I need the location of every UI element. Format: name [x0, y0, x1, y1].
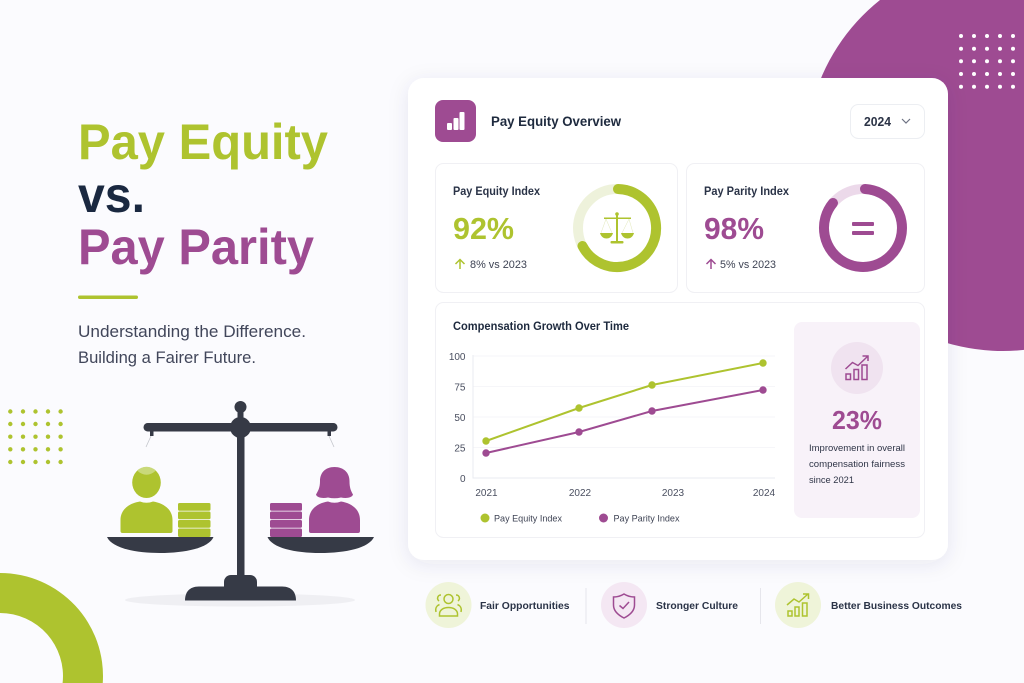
title underline: [78, 296, 138, 299]
year dropdown: 2024: [864, 115, 891, 129]
panel: compensation growth: [436, 302, 924, 538]
callout: 23% improvement: compensation fairness: [809, 459, 905, 470]
line chart: 2021: [475, 488, 498, 499]
line chart: 75: [454, 382, 466, 394]
benefit: better business outcomes: Better Business Outcomes: [831, 600, 962, 612]
callout: 23% improvement: Improvement in overall: [809, 443, 905, 454]
icon: green coin stack: [178, 503, 210, 537]
subtitle: [78, 322, 306, 367]
panel: pay parity index: 98%: [704, 211, 764, 246]
icon: growth chart purple: [846, 356, 868, 380]
illustration: balance scale: [107, 401, 374, 606]
green dot grid: [8, 409, 63, 464]
line chart: 50: [454, 413, 466, 424]
benefit: fair opportunities: Fair Opportunities: [480, 600, 570, 612]
decorative green ring: [0, 573, 103, 683]
arrow up green: [456, 260, 464, 269]
panel: pay equity index: 8% vs 2023: [470, 259, 527, 271]
year dropdown: [850, 104, 924, 138]
panel: pay equity index: [436, 164, 678, 292]
divider: [760, 588, 761, 624]
decorative purple circle: [806, 0, 1024, 351]
panel: pay parity index: Pay Parity Index: [704, 184, 789, 198]
title: [78, 114, 328, 275]
arrow up purple: [706, 260, 716, 269]
line chart: 100: [449, 352, 466, 363]
callout: 23% improvement: [794, 322, 920, 518]
white dot grid: [959, 34, 1015, 89]
callout: 23% improvement: since 2021: [809, 475, 854, 486]
donut chart: 92%: [578, 189, 656, 267]
icon: scales: [600, 212, 634, 244]
icon: man figure: [120, 467, 172, 533]
panel: pay parity index: [686, 164, 924, 292]
dashboard card: [408, 78, 948, 560]
benefit: stronger culture: Stronger Culture: [656, 600, 738, 612]
line chart: 2022: [569, 488, 592, 499]
line chart: 25: [454, 444, 466, 454]
title: vs.: [78, 167, 145, 223]
callout: 23% improvement: 23%: [832, 405, 882, 435]
benefit: fair opportunities: [426, 582, 570, 628]
panel: pay equity index: Pay Equity Index: [453, 184, 540, 198]
header icon: [435, 100, 476, 142]
divider: [586, 588, 587, 624]
chart legend: Pay Parity Index: [614, 514, 680, 524]
chart heading: Compensation Growth Over Time: [453, 321, 629, 333]
subtitle: Building a Fairer Future.: [78, 348, 256, 367]
panel: pay parity index: 5% vs 2023: [720, 259, 776, 271]
line chart: [449, 352, 776, 499]
line chart: 0: [460, 474, 466, 485]
icon: purple coin stack: [270, 503, 302, 537]
chart legend: [480, 514, 680, 524]
chart legend: Pay Equity Index: [494, 514, 562, 524]
icon: woman figure: [309, 467, 360, 533]
benefit: stronger culture: [601, 582, 738, 628]
icon: equals sign: [852, 222, 874, 235]
benefit: better business outcomes: [775, 582, 962, 628]
line chart: 2023: [662, 488, 685, 499]
subtitle: Understanding the Difference.: [78, 322, 306, 341]
title: Pay Equity: [78, 114, 328, 170]
donut chart: 98%: [824, 189, 902, 267]
line chart: 2024: [753, 488, 776, 499]
panel: pay equity index: 92%: [453, 211, 514, 246]
dashboard heading: Pay Equity Overview: [491, 114, 621, 129]
title: Pay Parity: [78, 219, 314, 275]
